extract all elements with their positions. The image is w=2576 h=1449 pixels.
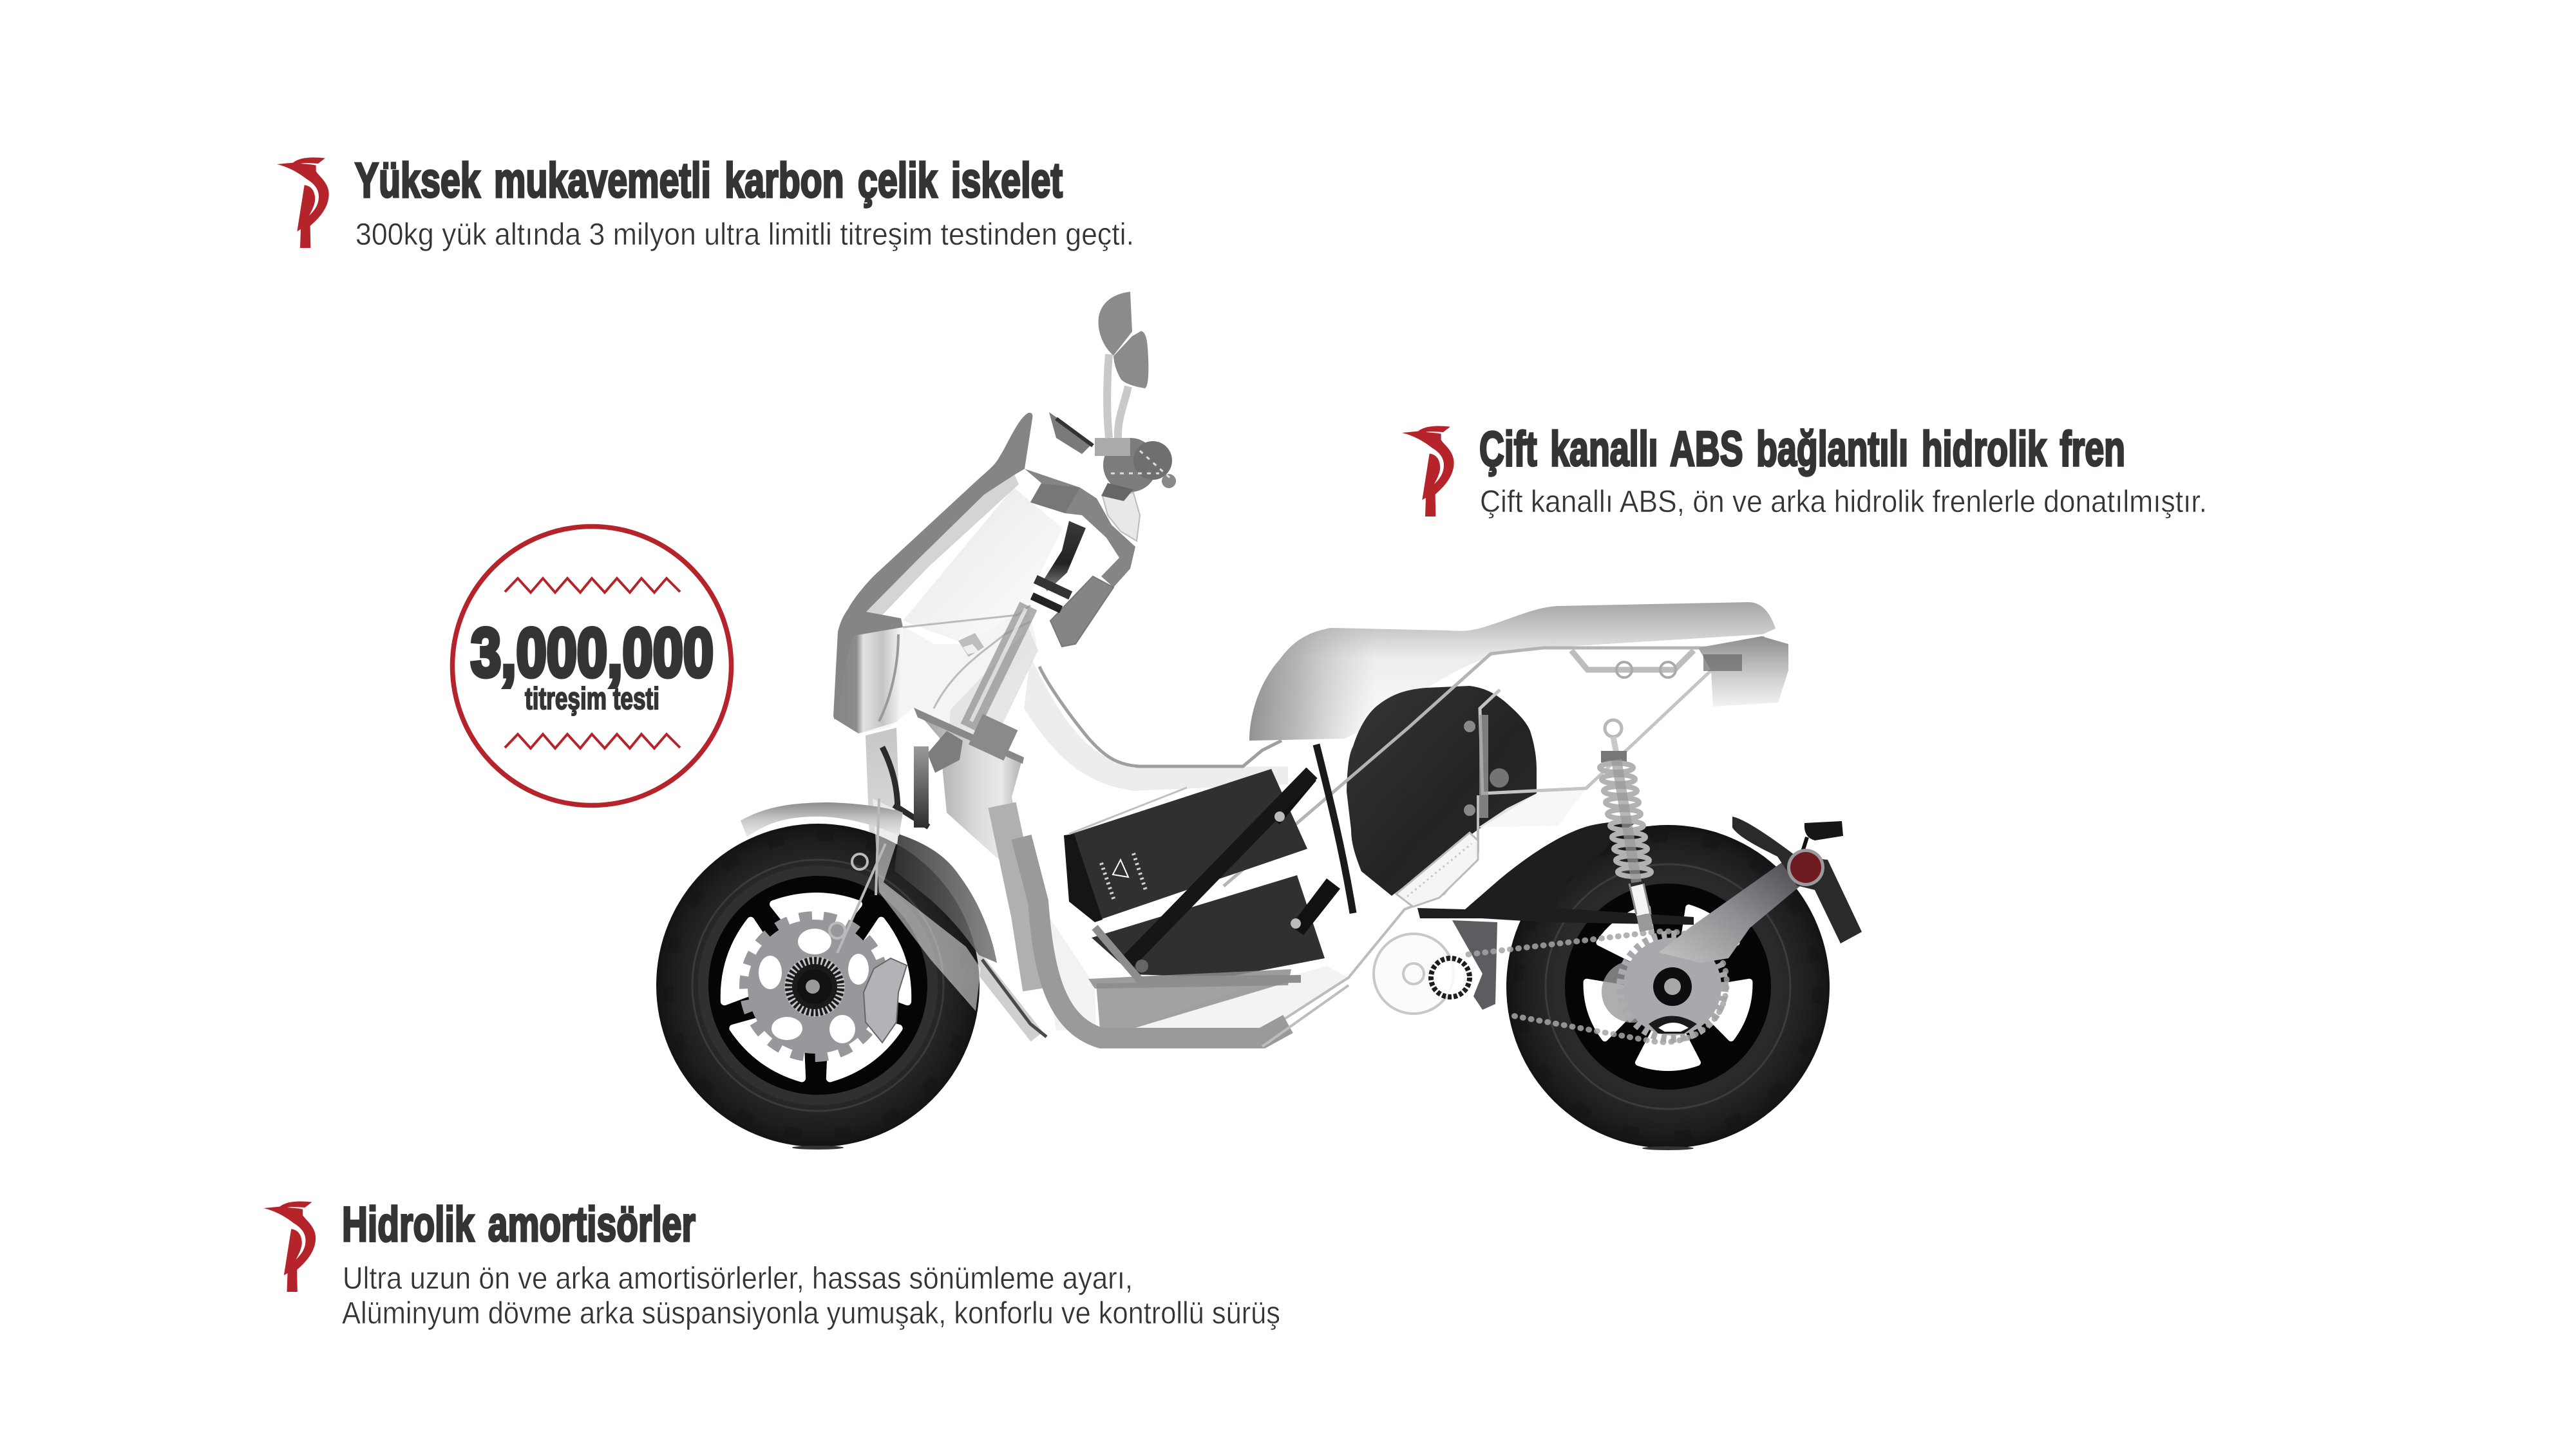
illustration: transparent electric scooter bbox=[656, 292, 1862, 1150]
text: shocks description: Alüminyum dövme arka süspansiyonla yumuşak, konforlu ve kontrollü sürüş bbox=[342, 1296, 1280, 1331]
icon: red woodpecker logo bbox=[1402, 426, 1454, 516]
label: vibration test: titreşim testi bbox=[525, 682, 659, 716]
feature: hydraulic shocks bbox=[263, 1197, 1280, 1331]
part: front shield bbox=[833, 413, 1032, 721]
part: seat bbox=[1249, 602, 1776, 741]
icon: red woodpecker logo bbox=[277, 158, 329, 248]
strut: diagonal bbox=[1124, 773, 1312, 966]
feature: ABS brake bbox=[1402, 422, 2207, 519]
part: front fender and fork bbox=[741, 799, 997, 1011]
part: rear wheel bbox=[1506, 825, 1830, 1150]
part: top fairing and dash bbox=[969, 292, 1176, 728]
part: rear shock absorber bbox=[1600, 720, 1651, 931]
part: rear license bracket and fender tip bbox=[1732, 817, 1862, 943]
battery upper bbox=[1067, 769, 1307, 920]
tire bbox=[1506, 825, 1830, 1148]
part: helmet bbox=[1347, 686, 1537, 896]
spoke gaps bbox=[717, 896, 915, 1084]
heading: brake: Çift kanallı ABS bağlantılı hidrolik fren bbox=[1479, 422, 2125, 477]
sprocket bbox=[1621, 935, 1724, 1038]
brake caliper bbox=[864, 958, 907, 1043]
text: shocks description: Ultra uzun ön ve arka amortisörlerler, hassas sönümleme ayarı, bbox=[343, 1262, 1133, 1296]
spoke gaps bbox=[1582, 904, 1754, 1068]
part: rear frame and tail bbox=[1224, 636, 1788, 1030]
battery lower bbox=[1092, 875, 1325, 978]
icon: red reflector bbox=[1787, 849, 1824, 886]
part: front wheel bbox=[656, 824, 980, 1150]
tire bbox=[656, 824, 980, 1147]
body: light translucent shells bbox=[835, 488, 1349, 1034]
text: shocks description bbox=[342, 1262, 1280, 1331]
text: brake description: Çift kanallı ABS, ön ve arka hidrolik frenlerle donatılmıştır. bbox=[1480, 485, 2207, 519]
part: lower leg shield and floor bbox=[866, 708, 1349, 1046]
part: handlebar stem and neck bbox=[1103, 493, 1140, 541]
feature: high-strength frame bbox=[277, 153, 1134, 252]
number: 3,000,000: 3,000,000 bbox=[471, 614, 714, 691]
part: drive sprocket and motor bbox=[1374, 920, 1497, 1014]
text: frame description: 300kg yük altında 3 milyon ultra limitli titreşim testinden geçti. bbox=[355, 218, 1134, 252]
heading: shocks: Hidrolik amortisörler bbox=[342, 1197, 696, 1252]
part: controls cluster bbox=[1095, 438, 1176, 501]
part: rear fender bbox=[1417, 822, 1694, 925]
part: swing arm bbox=[1659, 858, 1804, 963]
icon: red woodpecker logo bbox=[263, 1202, 316, 1292]
rim bbox=[1555, 873, 1781, 1100]
part: mirrors bbox=[1099, 292, 1148, 388]
strut: vertical bbox=[1316, 744, 1353, 913]
icon: turn signal bbox=[1800, 821, 1843, 860]
part: chain bbox=[1468, 931, 1727, 1042]
rim bbox=[698, 866, 938, 1105]
callout: vibration test badge bbox=[452, 527, 732, 805]
part: steering tube bbox=[1041, 521, 1086, 591]
heading: frame: Yüksek mukavemetli karbon çelik iskelet bbox=[355, 153, 1063, 208]
part: mirror stems bbox=[1107, 354, 1128, 438]
part: rear battery packs bbox=[1064, 744, 1353, 1034]
brake disc bbox=[744, 916, 886, 1057]
